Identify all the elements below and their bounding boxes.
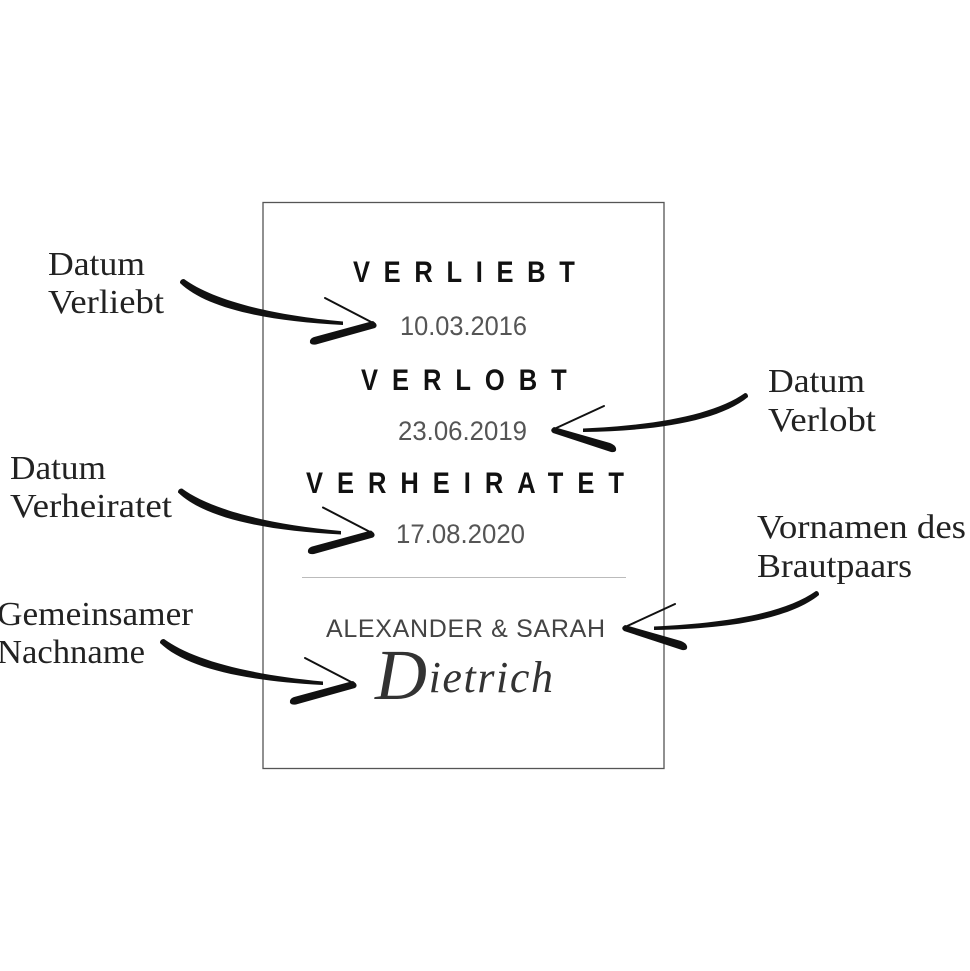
surname script: D	[374, 635, 427, 715]
arrow: Vornamen des Brautpaars	[622, 591, 819, 650]
arrow: Datum Verliebt	[180, 279, 377, 345]
label: Vornamen des Brautpaars: Brautpaars	[757, 548, 912, 585]
label: Datum Verliebt: Datum	[48, 246, 145, 283]
label: Datum Verheiratet: Datum	[10, 450, 106, 487]
heading: Verheiratet: VERHEIRATET	[306, 466, 624, 499]
date: Verlobt: 23.06.2019	[398, 416, 527, 446]
heading: Verliebt: VERLIEBT	[353, 255, 575, 288]
label: Datum Verlobt: Datum	[768, 363, 865, 400]
label: Gemeinsamer Nachname: Nachname	[0, 634, 145, 671]
label: Vornamen des Brautpaars: Vornamen des	[757, 509, 966, 546]
label: Datum Verheiratet: Verheiratet	[10, 488, 173, 525]
date: Verliebt: 10.03.2016	[400, 311, 527, 341]
arrow: Gemeinsamer Nachname	[160, 639, 357, 705]
label: Datum Verlobt	[768, 363, 877, 439]
label: Vornamen des Brautpaars	[757, 509, 966, 585]
first names: ALEXANDER & SARAH	[326, 615, 605, 643]
arrow: Datum Verlobt	[551, 393, 748, 452]
label: Datum Verheiratet	[10, 450, 173, 525]
label: Datum Verlobt: Verlobt	[768, 402, 877, 439]
arrow: Datum Verheiratet	[178, 488, 375, 554]
label: Datum Verliebt: Verliebt	[48, 284, 165, 321]
label: Gemeinsamer Nachname: Gemeinsamer	[0, 596, 193, 633]
heading: Verlobt: VERLOBT	[361, 363, 567, 396]
poster panel	[263, 202, 664, 768]
label: Datum Verliebt	[48, 246, 165, 321]
surname script: ietrich	[429, 653, 553, 702]
label: Gemeinsamer Nachname	[0, 596, 193, 671]
date: Verheiratet: 17.08.2020	[396, 519, 525, 549]
